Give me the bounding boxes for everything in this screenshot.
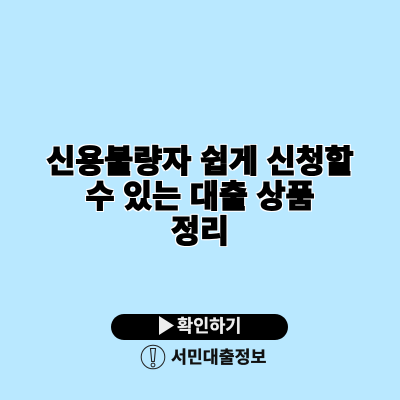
icon: exclamation circle bbox=[140, 344, 166, 370]
brand row bbox=[140, 344, 266, 370]
title bbox=[46, 143, 354, 249]
title: 수 있는 대출 상품 bbox=[85, 178, 315, 214]
button label: 확인하기 bbox=[177, 316, 241, 336]
title: 신용불량자 쉽게 신청할 bbox=[46, 143, 354, 179]
button: confirm bbox=[111, 314, 288, 340]
brand name: 서민대출정보 bbox=[171, 347, 266, 367]
icon: play triangle bbox=[159, 316, 174, 335]
title: 정리 bbox=[171, 213, 229, 249]
